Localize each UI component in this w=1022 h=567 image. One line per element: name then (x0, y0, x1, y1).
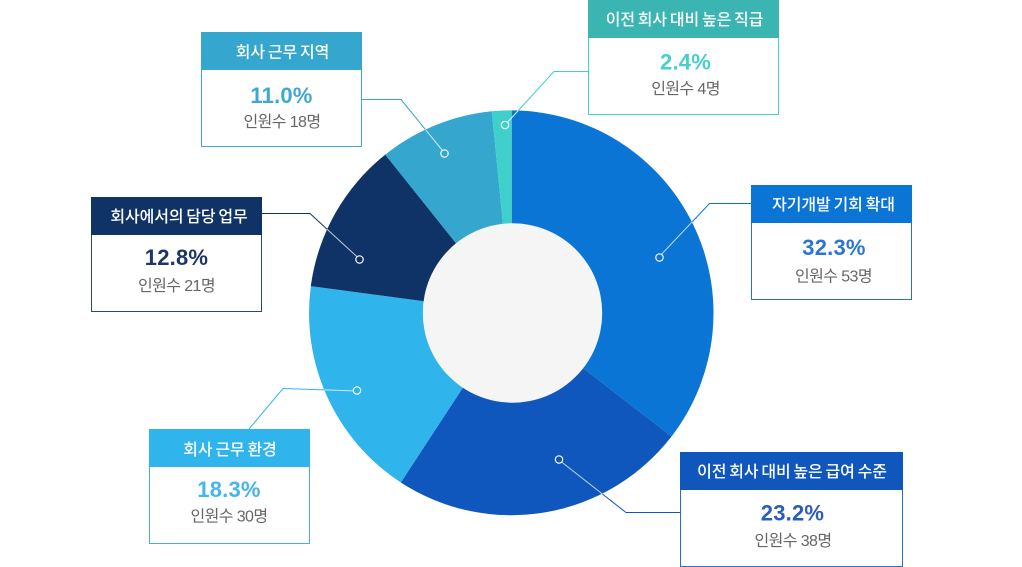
percentage: 2.4% (660, 50, 711, 74)
leader line (505, 72, 588, 125)
callout: higher position (501, 0, 779, 129)
percentage: 23.2% (761, 500, 824, 526)
callout: work environment (149, 387, 361, 544)
marker dot (656, 254, 663, 261)
box (588, 0, 778, 114)
header (588, 0, 779, 38)
header (91, 197, 262, 235)
slice: pay level 23.2% (401, 313, 672, 515)
marker dot (441, 150, 448, 157)
leader line highlight (661, 221, 693, 254)
header (751, 185, 912, 223)
leader line highlight (327, 229, 357, 257)
box (202, 32, 362, 146)
percentage: 18.3% (197, 477, 261, 502)
box (752, 186, 912, 300)
header (680, 452, 903, 490)
header (201, 32, 362, 70)
percentage: 11.0% (250, 83, 313, 108)
header text: 자기개발 기회 확대 (772, 196, 895, 214)
leader line (262, 214, 360, 259)
box (680, 452, 902, 566)
marker dot (501, 121, 509, 129)
header text: 회사 근무 환경 (183, 441, 277, 459)
head count: 인원수 30명 (191, 508, 267, 526)
box (92, 198, 262, 312)
leader line (559, 460, 680, 512)
donut chart (309, 110, 713, 515)
slice: career development 32.3% (512, 110, 713, 437)
callout: career development (656, 185, 912, 300)
head count: 인원수 53명 (795, 268, 872, 286)
slice: work environment 18.3% (309, 286, 512, 482)
leader line (249, 388, 357, 429)
marker dot (555, 456, 563, 463)
header text: 이전 회사 대비 높은 직급 (606, 11, 763, 29)
head count: 인원수 21명 (138, 277, 215, 295)
head count: 인원수 4명 (651, 80, 720, 98)
percentage: 12.8% (145, 245, 208, 270)
callout: work location (201, 32, 448, 157)
donut hole (423, 223, 602, 403)
callout: job duties (91, 197, 363, 312)
box (150, 430, 310, 544)
leader line (362, 100, 444, 153)
leader line highlight (562, 462, 603, 494)
slice: job duties 12.8% (311, 155, 512, 313)
marker dot (356, 256, 363, 263)
head count: 인원수 38명 (755, 532, 831, 550)
slice: work location 11.0% (385, 111, 512, 313)
head count: 인원수 18명 (244, 113, 320, 131)
leader line highlight (324, 389, 353, 392)
header text: 회사에서의 담당 업무 (110, 208, 248, 226)
percentage: 32.3% (802, 235, 866, 260)
header (149, 429, 310, 467)
leader line (659, 204, 751, 257)
slice: higher position 2.4% (492, 110, 512, 313)
leader line highlight (425, 130, 443, 150)
header text: 회사 근무 지역 (236, 44, 329, 62)
header text: 이전 회사 대비 높은 급여 수준 (697, 463, 887, 481)
callout: pay level (555, 452, 903, 566)
marker dot (353, 387, 361, 394)
leader line highlight (508, 110, 519, 122)
